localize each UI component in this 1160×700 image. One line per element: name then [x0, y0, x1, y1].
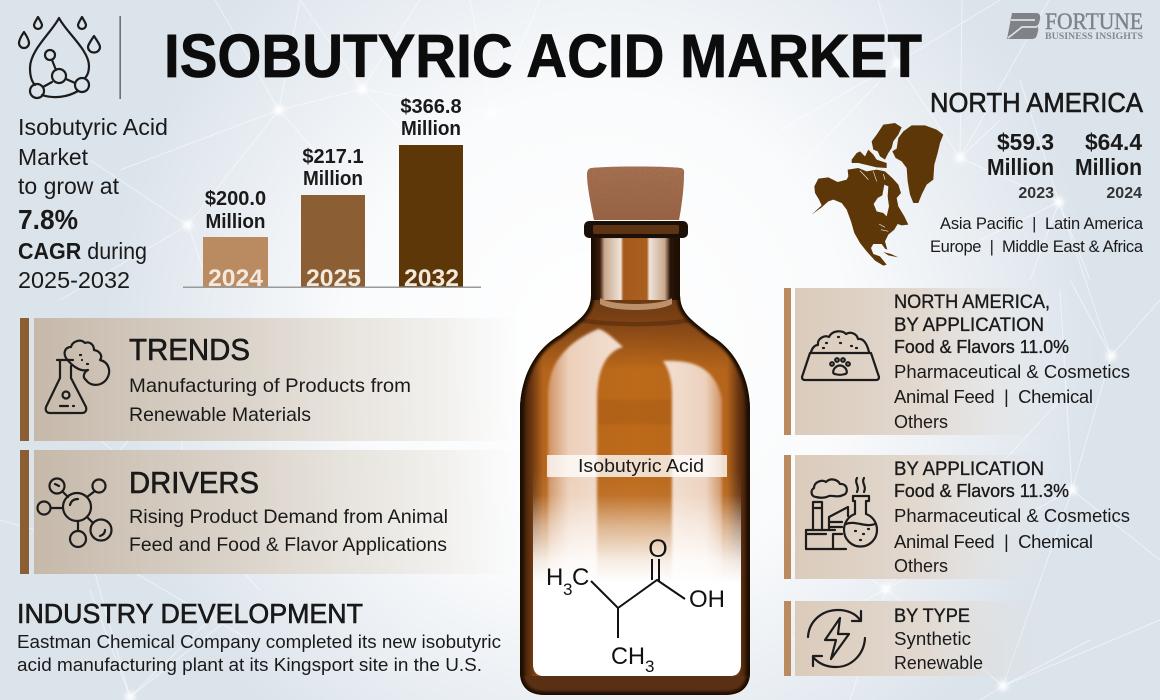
heading: drivers: DRIVERS: [129, 465, 259, 500]
bar 2025: [301, 146, 365, 292]
bottle glass: [520, 233, 750, 695]
label: isobutyric acid: Isobutyric Acid: [578, 456, 704, 476]
icon: factory and flask: [806, 478, 877, 549]
text: north america by application: BY APPLICATION: [894, 315, 1044, 336]
value 2023: $59.3: [997, 129, 1054, 155]
chemical structure: O: [648, 535, 668, 563]
regions list: Asia Pacific | Latin America: [940, 215, 1144, 233]
heading: trends: TRENDS: [129, 332, 250, 367]
chemical structure: 3: [645, 657, 654, 676]
text: by type: Synthetic: [894, 628, 971, 649]
north america values: [987, 129, 1142, 202]
text: by application: BY APPLICATION: [894, 459, 1044, 480]
heading: industry development: INDUSTRY DEVELOPMENT: [17, 598, 363, 629]
bar 2024: [203, 188, 268, 292]
value 2023: 2023: [1018, 185, 1054, 202]
map: north america: [812, 123, 943, 266]
text: north america by application: NORTH AMERICA,: [894, 292, 1050, 313]
text: trends description: Renewable Materials: [129, 404, 311, 426]
logo mark: [1007, 13, 1040, 39]
text: north america by application: Pharmaceutical & Cosmetics: [894, 361, 1130, 382]
CAGR text block: [18, 114, 168, 293]
text: by application: [894, 459, 1130, 576]
panel: drivers: [20, 450, 520, 574]
text: trends description: Manufacturing of Products from: [129, 375, 411, 397]
chemical structure: OH: [689, 586, 725, 613]
text: north america by application: Food & Flavors 11.0%: [894, 336, 1069, 357]
logo: Fortune Business Insights: [1007, 9, 1143, 42]
bottle: [520, 166, 750, 695]
CAGR text block: Market: [18, 144, 88, 170]
title: ISOBUTYRIC ACID MARKET: [164, 22, 922, 90]
text: drivers description: Rising Product Demand from Animal: [129, 506, 448, 528]
text: trends description: [129, 375, 411, 426]
bar 2025: Million: [303, 168, 363, 190]
CAGR text block: 2025-2032: [18, 267, 130, 293]
header divider: [120, 16, 121, 99]
CAGR text block: 7.8%: [18, 204, 78, 235]
industry development: [17, 598, 501, 675]
chemical structure: [546, 535, 725, 676]
chemical structure: H: [546, 564, 563, 591]
CAGR text block: Isobutyric Acid: [18, 114, 168, 140]
value 2023: [987, 129, 1054, 202]
value 2024: [1075, 129, 1142, 202]
label: isobutyric acid: [547, 455, 727, 477]
icon: renewable energy: [808, 610, 865, 667]
logo: Fortune Business Insights: BUSINESS INSIGHTS: [1045, 32, 1143, 42]
regions list: [930, 215, 1144, 256]
panel: by type: [784, 601, 1055, 676]
text: by application: Animal Feed | Chemical: [894, 531, 1093, 552]
cork: [587, 166, 684, 220]
panel: by application: [784, 455, 1130, 579]
text: industry development description: Eastman Chemical Company completed its new isobutyric: [17, 631, 501, 652]
text: drivers description: [129, 506, 448, 556]
text: drivers description: Feed and Food & Flavor Applications: [129, 534, 447, 556]
bar 2024: Million: [206, 211, 266, 233]
heading: north america: NORTH AMERICA: [930, 87, 1143, 118]
chemical structure: C: [572, 564, 589, 591]
bottle lip: [584, 221, 688, 238]
value 2024: Million: [1075, 154, 1142, 180]
bar 2025: 2025: [306, 265, 361, 292]
text: by application: Food & Flavors 11.3%: [894, 480, 1069, 501]
icon: drop with molecule: [19, 17, 100, 98]
bar 2032: Million: [401, 118, 461, 140]
panel: north america by application: [784, 288, 1130, 435]
text: north america by application: [894, 292, 1130, 432]
value 2024: $64.4: [1085, 129, 1142, 155]
text: by type: Renewable: [894, 652, 983, 673]
text: by type: BY TYPE: [894, 606, 970, 627]
bar 2032: 2032: [404, 265, 459, 292]
text: industry development description: [17, 631, 501, 675]
value 2023: Million: [987, 154, 1054, 180]
value 2024: 2024: [1106, 185, 1142, 202]
text: industry development description: acid manufacturing plant at its Kingsport site in the U.S.: [17, 654, 482, 675]
icon: pet food bowl: [802, 331, 879, 380]
text: by application: Pharmaceutical & Cosmetics: [894, 505, 1130, 526]
icon: flask with foam: [46, 341, 109, 413]
chemical structure: 3: [563, 580, 572, 599]
bar 2032: $366.8: [400, 96, 462, 118]
logo wordmark: FORTUNE: [1045, 9, 1143, 34]
icon: molecule: [38, 478, 112, 547]
bar 2024: 2024: [208, 265, 264, 292]
text: north america by application: Others: [894, 411, 948, 432]
CAGR text block: CAGR during: [18, 238, 147, 264]
bar 2024: $200.0: [205, 188, 266, 210]
bar 2025: $217.1: [302, 146, 364, 168]
text: by type: [894, 606, 983, 673]
panel: trends: [20, 318, 520, 441]
bar 2032: [399, 96, 463, 292]
regions list: Europe | Middle East & Africa: [930, 238, 1144, 256]
text: north america by application: Animal Feed | Chemical: [894, 386, 1093, 407]
text: by application: Others: [894, 555, 948, 576]
bar chart: [183, 96, 481, 292]
chemical structure: CH: [611, 643, 645, 670]
CAGR text block: to grow at: [18, 173, 119, 199]
